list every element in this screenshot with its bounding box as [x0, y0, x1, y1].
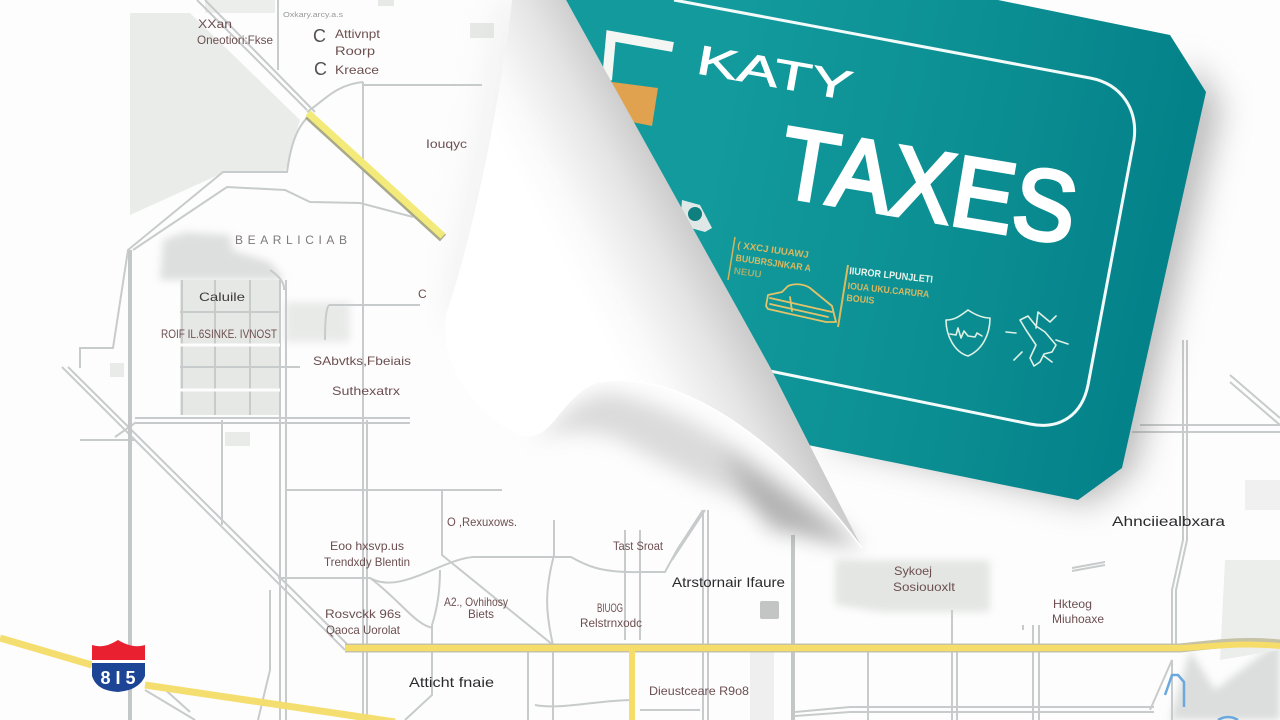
map labels: south: Qaoca Uorolat — [326, 623, 401, 637]
text block: white and gold info two: IOUA UKU.CARURA — [847, 281, 930, 300]
map labels: south: Trendxdy Blentin — [324, 555, 410, 569]
map labels: north west — [161, 12, 467, 398]
map labels: south: Rosvckk 96s — [325, 607, 401, 621]
text block: white and gold info two: IIUROR LPUNJLETI — [849, 266, 934, 286]
map labels: north west: Oxkary.arcy.a.s — [283, 12, 344, 19]
logo: orange square — [612, 82, 658, 126]
icon: hand sketch — [1006, 312, 1068, 366]
map labels: north west: C — [314, 59, 327, 79]
map labels: south: A2., Ovhihosy — [444, 595, 508, 609]
map labels: south: Ahnciiealbxara — [1112, 513, 1225, 529]
paper curl flap — [445, 0, 862, 548]
map labels: south: Sykoej — [894, 564, 932, 578]
map labels: south: O ,Rexuxows. — [447, 515, 517, 529]
map: water — [1165, 675, 1238, 720]
map labels: south: Miuhoaxe — [1052, 612, 1104, 626]
gold divider one — [728, 237, 735, 280]
gold divider two — [838, 265, 848, 327]
map labels: south: Hkteog — [1053, 597, 1092, 611]
map labels: south — [324, 513, 1225, 698]
map labels: south: Eoo hxsvp.us — [330, 539, 404, 553]
map labels: north west: Kreace — [335, 63, 379, 77]
map labels: north west: C — [313, 26, 326, 46]
map labels: north west: SAbvtks,Fbeiais — [313, 354, 411, 368]
map labels: north west: Suthexatrx — [332, 384, 400, 398]
icon: shield — [946, 310, 990, 356]
map labels: north west: ROIF IL.6SINKE. IVNOST — [161, 327, 278, 341]
logo: white bracket — [607, 36, 673, 80]
curl edge highlight — [600, 380, 862, 548]
map labels: south: Relstrnxodc — [580, 616, 642, 630]
text block: gold info one: ( XXCJ IUUAWJ — [737, 240, 809, 261]
map labels: north west: BEARLICIAB — [235, 233, 347, 247]
card shadow — [820, 60, 1222, 505]
panel: teal katy taxes card — [566, 0, 1206, 500]
icon: interstate shield: 8 I 5 — [100, 668, 136, 688]
icon: car — [766, 284, 836, 322]
shadow under paper curl — [445, 0, 862, 548]
text block: white and gold info two — [846, 266, 934, 313]
map labels: north west: XXan — [198, 17, 232, 31]
map labels: south: Atticht fnaie — [409, 674, 494, 690]
brand name KATY: KATY — [693, 37, 856, 109]
map labels: south: Tast Sroat — [613, 539, 664, 553]
card inner outline — [674, 0, 1135, 425]
map labels: north west: Roorp — [335, 44, 375, 58]
map labels: north west: C — [418, 287, 427, 301]
map labels: north west: Attivnpt — [335, 27, 381, 41]
text block: white and gold info two: BOUIS — [846, 293, 875, 307]
map labels: south: BIUOG — [597, 601, 623, 615]
map labels: south: Dieustceare R9o8 — [649, 684, 749, 698]
map: grid roads white gaps — [180, 345, 280, 390]
text block: gold info one: BUUBRSJNKAR A — [735, 253, 812, 274]
map labels: south: Atrstornair Ifaure — [672, 574, 785, 590]
map labels: south: Sosiouoxlt — [893, 580, 956, 594]
icon fragment: eye — [680, 200, 712, 232]
heading TAXES: TAXES — [772, 106, 1085, 266]
map labels: north west: Iouqyc — [426, 137, 467, 151]
text block: gold info one: NEUU — [733, 266, 762, 281]
text block: gold info one — [733, 240, 813, 287]
map labels: north west: Caluile — [199, 290, 245, 304]
map labels: north west: Oneotiori:Fkse — [197, 33, 273, 47]
map labels: south: Biets — [468, 607, 494, 621]
icon: interstate shield — [92, 640, 145, 692]
